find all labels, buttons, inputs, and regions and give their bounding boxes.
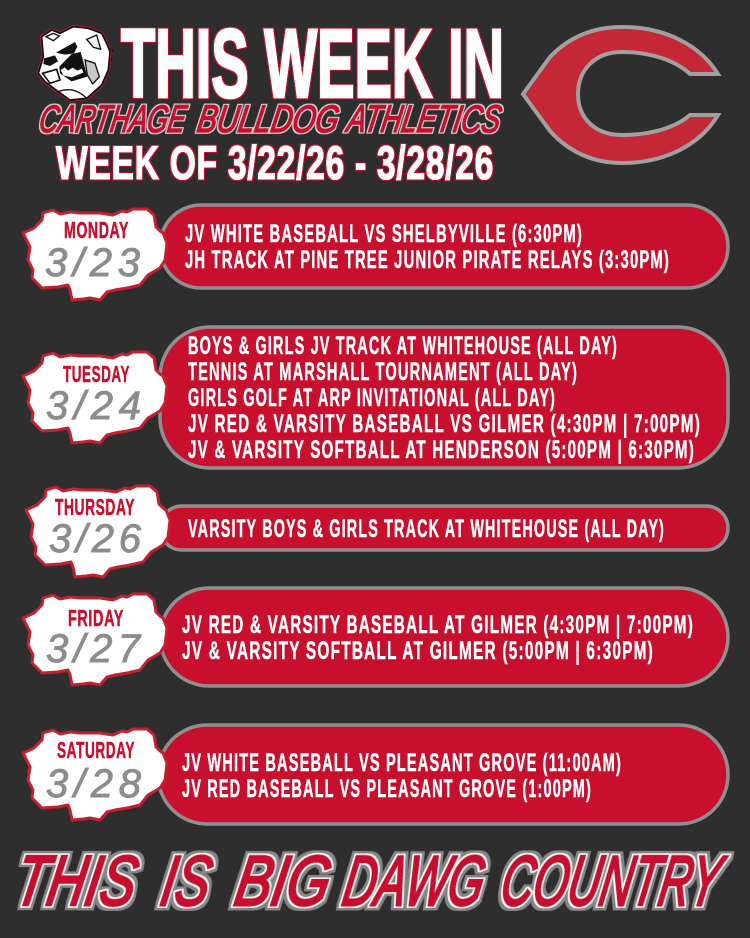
slogan: DAWG	[338, 841, 492, 920]
slogan: BIG	[230, 841, 338, 920]
slogan: THIS	[10, 841, 144, 920]
date range heading: WEEK OF 3/22/26 - 3/28/26	[56, 136, 494, 189]
subtitle: ATHLETICS	[343, 98, 505, 141]
subtitle: CARTHAGE	[36, 98, 190, 141]
badge: Monday: 3/23	[45, 241, 140, 285]
panel: Monday events	[160, 205, 728, 288]
badge: Saturday: 3/28	[46, 762, 142, 806]
panel: Tuesday events	[160, 327, 728, 468]
badge: Monday: MONDAY	[64, 217, 129, 243]
slogan: IS	[156, 841, 218, 920]
icon: bulldog mascot	[38, 27, 114, 100]
badge: Thursday: THURSDAY	[55, 494, 135, 520]
panel: Friday events	[160, 588, 728, 686]
badge: Saturday: SATURDAY	[57, 737, 135, 763]
badge: Monday	[23, 209, 167, 300]
badge: Friday	[23, 594, 167, 685]
icon: red C logo	[523, 27, 718, 163]
badge: Friday: 3/27	[46, 627, 142, 671]
subtitle	[36, 98, 505, 141]
panel: Saturday events	[158, 725, 728, 824]
badge: Saturday	[23, 729, 167, 820]
subtitle: BULLDOG	[194, 98, 343, 141]
badge: Thursday	[26, 486, 170, 577]
badge: Friday: FRIDAY	[68, 605, 124, 631]
badge: Tuesday: 3/24	[46, 384, 141, 428]
badge: Thursday: 3/26	[49, 517, 142, 561]
panel: Thursday events	[160, 506, 728, 550]
slogan	[10, 841, 731, 920]
badge: Tuesday	[23, 352, 167, 443]
badge: Tuesday: TUESDAY	[63, 361, 130, 387]
